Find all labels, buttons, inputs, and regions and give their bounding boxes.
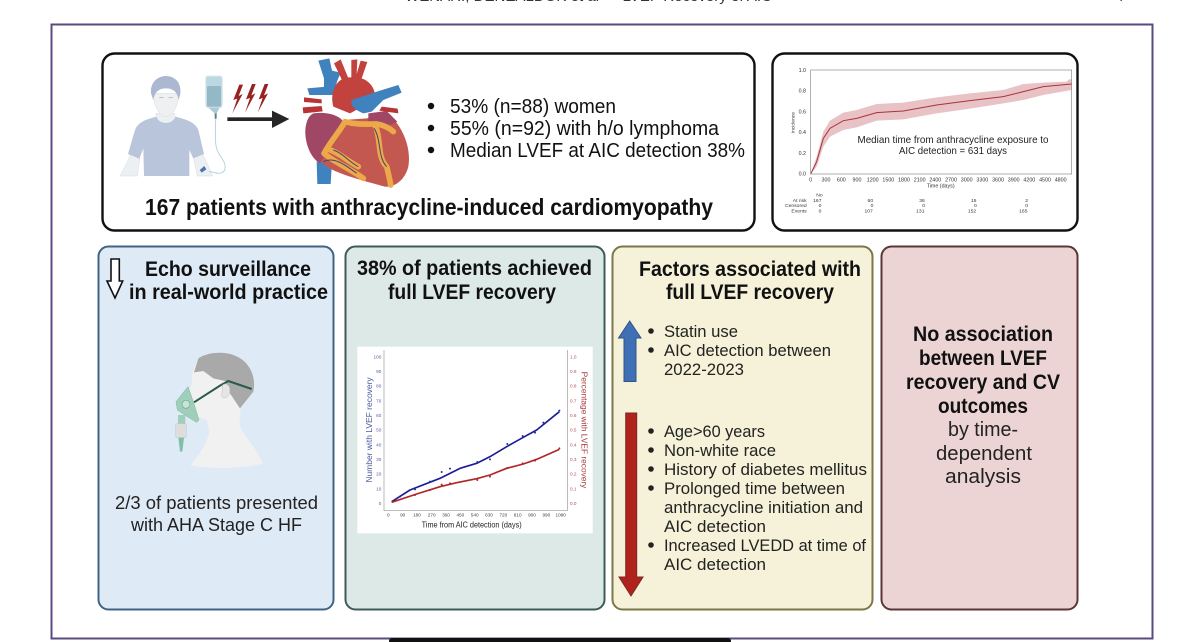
line chart: cumulative incidence: Censored [785,203,807,209]
heading: echo surveillance: Echo surveillance [145,258,311,281]
chart annotation: median time [858,134,1049,157]
line chart: LVEF recovery over time: 1080 [555,513,566,518]
text: analysis method: analysis [945,466,1021,488]
text: analysis method [936,419,1032,488]
icon: lightning bolts [232,84,268,113]
chart annotation: median time: Median time from anthracycline exposure to [858,134,1049,146]
list: positive factors: Statin use [664,322,738,341]
line chart: LVEF recovery over time: 0.0 [570,501,577,506]
line chart: cumulative incidence: 0 [819,203,822,209]
line chart: cumulative incidence: 3000 [961,177,973,183]
line chart: cumulative incidence: 3600 [992,177,1004,183]
arrow: exposure to heart [227,111,289,128]
line chart: cumulative incidence: 0 [809,177,812,183]
line chart: cumulative incidence: 165 [1019,208,1028,214]
line chart: cumulative incidence: 4500 [1039,177,1051,183]
line chart: cumulative incidence: 107 [865,208,873,214]
line chart: LVEF recovery over time: 900 [528,513,536,518]
line chart: cumulative incidence: 167 [813,198,822,204]
line chart: cumulative incidence: 0 [974,203,977,209]
line chart: cumulative incidence: 1800 [898,177,910,183]
line chart: cumulative incidence [785,68,1072,214]
line chart: LVEF recovery over time: 90 [376,369,382,374]
line chart: cumulative incidence: 4200 [1023,177,1035,183]
list: negative factors: Prolonged time between [664,479,845,498]
line chart: LVEF recovery over time: 0.1 [570,486,577,491]
line chart: cumulative incidence: Incidence [791,112,797,133]
line chart: LVEF recovery over time: 720 [499,513,508,518]
line chart: cumulative incidence: 0.4 [799,130,806,136]
list: positive factors: 2022-2023 [664,360,744,379]
line chart: cumulative incidence: Time (days) [927,183,955,189]
panel: echo surveillance [98,246,334,610]
line chart: LVEF recovery over time: 0 [387,513,390,518]
bullet list: cohort characteristics: 55% (n=92) with h/o lymphoma [450,118,720,140]
line chart: cumulative incidence: 15 [971,198,977,204]
line chart: cumulative incidence: 300 [822,177,830,183]
line chart: cumulative incidence: 2700 [945,177,957,183]
line chart: cumulative incidence: 60 [868,198,873,204]
heading: cohort: 167 patients with anthracycline-induced cardiomyopathy [145,194,713,220]
icon: patient with oxygen mask [176,353,263,468]
list: negative factors: History of diabetes mellitus [664,460,867,479]
line chart: cumulative incidence: 0 [1025,203,1028,209]
heading: recovery rate [357,257,592,304]
list: negative factors: Increased LVEDD at time of [664,536,866,555]
text: no association: between LVEF [919,347,1047,370]
bullet list: cohort characteristics: 53% (n=88) women [450,96,616,118]
line chart: cumulative incidence: 0.8 [799,89,806,95]
line chart: cumulative incidence: 0.2 [799,151,806,157]
line chart: LVEF recovery over time: 30 [376,457,382,462]
arrow: negative factors [619,413,643,596]
line chart: cumulative incidence: 152 [968,208,976,214]
line chart: cumulative incidence: At risk [793,198,807,204]
line chart: cumulative incidence: 131 [916,208,925,214]
line chart: LVEF recovery over time: 90 [400,513,406,518]
line chart: LVEF recovery over time: 50 [376,428,382,433]
line chart: LVEF recovery over time: Percentage with LVEF recovery [579,372,588,488]
line chart: LVEF recovery over time: 0.6 [570,413,577,418]
line chart: cumulative incidence: 900 [853,177,861,183]
icon: heart [303,58,409,187]
text: no association: No association [913,323,1053,346]
bullet list: cohort characteristics [428,96,745,162]
line chart: LVEF recovery over time: Number with LVEF recovery [365,377,374,483]
panel: cohort summary [102,54,754,230]
line chart: cumulative incidence: 2100 [914,177,926,183]
line chart: cumulative incidence: 3300 [976,177,988,183]
heading: factors: Factors associated with [639,258,861,281]
line chart: LVEF recovery over time: 0.4 [570,442,577,447]
line chart: cumulative incidence: 0 [871,203,874,209]
text: stage C HF: with AHA Stage C HF [130,515,302,535]
line chart: cumulative incidence: 1.0 [799,68,806,74]
line chart: LVEF recovery over time [357,347,593,533]
arrow: positive factors [618,321,641,382]
list: positive factors: AIC detection between [664,341,831,360]
line chart: LVEF recovery over time: 20 [376,472,382,477]
line chart: LVEF recovery over time: 0.9 [570,369,577,374]
line chart: LVEF recovery over time: 10 [376,486,382,491]
line chart: LVEF recovery over time: 70 [376,398,382,403]
list: negative factors: anthracycline initiation and [664,498,863,517]
line chart: cumulative incidence: 3900 [1008,177,1020,183]
text: no association [906,323,1060,418]
line chart: LVEF recovery over time: 100 [374,354,382,359]
text: no association: recovery and CV [906,371,1060,394]
panel: LVEF recovery [346,246,604,610]
line chart: LVEF recovery over time: 990 [542,513,551,518]
text: stage C HF: 2/3 of patients presented [115,493,318,513]
heading: factors: full LVEF recovery [666,281,834,304]
text: stage C HF [115,493,318,535]
list: negative factors: Age>60 years [664,422,765,441]
heading: echo surveillance [129,258,328,304]
line chart: LVEF recovery over time: 60 [376,413,382,418]
line chart: cumulative incidence: 1500 [882,177,894,183]
line chart: cumulative incidence: 0 [922,203,925,209]
list: negative factors: AIC detection [664,555,766,574]
panel: associated factors [612,246,872,610]
list: negative factors: AIC detection [664,517,766,536]
line chart: cumulative incidence: No [816,193,823,199]
line chart: LVEF recovery over time: 630 [485,513,493,518]
line chart: cumulative incidence: 0.6 [799,109,806,115]
line chart: LVEF recovery over time: 450 [456,513,465,518]
heading: echo surveillance: in real-world practice [129,281,328,304]
panel: CV outcomes [882,246,1078,610]
line chart: cumulative incidence: Events [791,208,807,214]
icon: outlined down arrow [107,259,123,298]
bullet list: cohort characteristics: Median LVEF at AIC detection 38% [450,140,745,162]
icon: patient receiving infusion [120,76,225,176]
line chart: cumulative incidence: 0 [819,208,822,214]
list: negative factors: Non-white race [664,441,776,460]
panel: time to detection chart [772,54,1078,230]
page running header [405,0,1126,4]
line chart: cumulative incidence: 1200 [867,177,879,183]
line chart: cumulative incidence: 0.0 [799,172,806,178]
line chart: LVEF recovery over time: 540 [471,513,479,518]
line chart: cumulative incidence: 36 [919,198,925,204]
line chart: cumulative incidence: 4800 [1055,177,1067,183]
line chart: LVEF recovery over time: 0.2 [570,472,577,477]
bottom black tab [389,638,731,642]
text: analysis method: dependent [936,443,1032,465]
line chart: LVEF recovery over time: 270 [428,513,436,518]
line chart: LVEF recovery over time: Time from AIC detection (days) [422,520,522,529]
line chart: LVEF recovery over time: 0.8 [570,384,577,389]
list: negative factors [648,422,867,574]
line chart: cumulative incidence: 600 [837,177,846,183]
line chart: LVEF recovery over time: 810 [514,513,522,518]
line chart: LVEF recovery over time: 0.5 [570,428,577,433]
text: analysis method: by time- [948,419,1018,441]
line chart: LVEF recovery over time: 0.3 [570,457,577,462]
line chart: LVEF recovery over time: 360 [442,513,450,518]
heading: factors [639,258,861,304]
line chart: cumulative incidence: 2400 [929,177,941,183]
line chart: LVEF recovery over time: 80 [376,384,382,389]
line chart: LVEF recovery over time: 180 [413,513,421,518]
line chart: LVEF recovery over time: 0.7 [570,398,577,403]
text: no association: outcomes [938,395,1028,418]
line chart: LVEF recovery over time: 40 [376,442,382,447]
line chart: cumulative incidence: 2 [1025,198,1028,204]
list: positive factors [648,322,831,379]
heading: recovery rate: full LVEF recovery [388,281,556,304]
heading: recovery rate: 38% of patients achieved [357,257,592,280]
line chart: LVEF recovery over time: 0 [379,501,382,506]
chart annotation: median time: AIC detection = 631 days [899,145,1007,157]
line chart: LVEF recovery over time: 1.0 [570,354,577,359]
